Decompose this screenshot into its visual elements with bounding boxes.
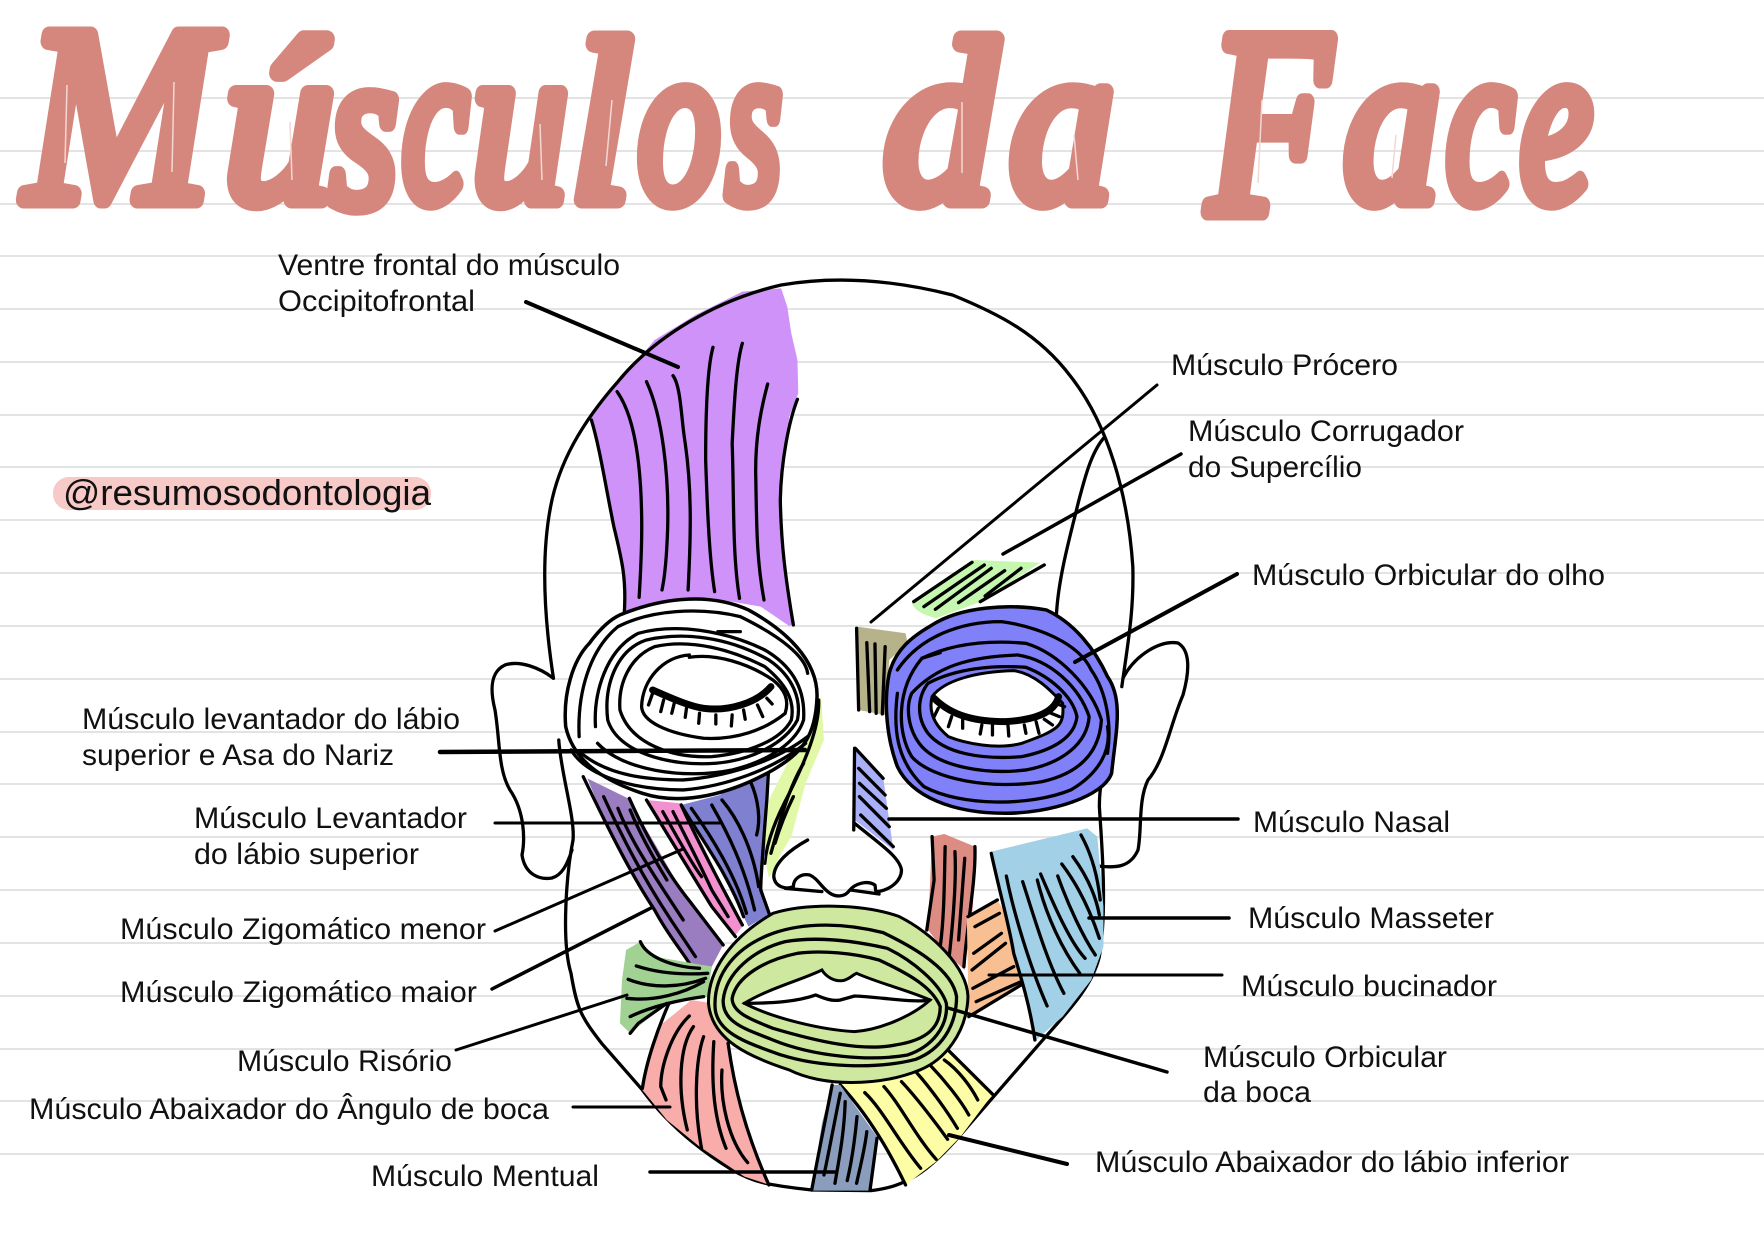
label: masseter: Músculo Masseter — [1248, 902, 1494, 935]
label: ventre frontal: Occipitofrontal — [278, 285, 475, 318]
right ear — [1098, 643, 1188, 867]
label: abaixador do ângulo de boca: Músculo Abaixador do Ângulo de boca — [29, 1093, 549, 1126]
muscle: mentual — [812, 1085, 877, 1191]
title: o — [638, 0, 720, 251]
left ear — [492, 663, 572, 878]
muscle: nasal — [854, 748, 893, 850]
head outline — [545, 280, 1133, 1191]
muscle: orbicular do olho esquerdo (branco) — [565, 599, 817, 799]
muscle: levantador do lábio superior e asa do nariz — [764, 697, 824, 878]
label: zigomático maior: Músculo Zigomático maior — [120, 976, 477, 1009]
muscle: abaixador do lábio inferior — [840, 1048, 993, 1185]
label: bucinador: Músculo bucinador — [1241, 970, 1497, 1003]
label: levantador lábio superior: do lábio superior — [194, 838, 419, 871]
label: ventre frontal: Ventre frontal do músculo — [278, 249, 620, 282]
nose — [774, 823, 901, 896]
title: s — [726, 0, 782, 251]
label: corrugador: Músculo Corrugador — [1188, 415, 1464, 448]
label: ventre frontal — [278, 249, 620, 318]
label: risório: Músculo Risório — [237, 1045, 452, 1078]
label: levantador lábio superior: Músculo Levantador — [194, 802, 467, 835]
title: e — [1520, 0, 1592, 251]
label: nasal: Músculo Nasal — [1253, 806, 1450, 839]
title: s — [330, 0, 398, 256]
title: u — [472, 0, 568, 251]
muscle: zigomático maior — [583, 777, 724, 967]
label: mentual: Músculo Mentual — [371, 1160, 599, 1193]
title: c — [402, 0, 468, 251]
label: orbicular da boca — [1203, 1041, 1447, 1109]
handle highlight: @resumosodontologia: @resumosodontologia — [63, 472, 432, 513]
muscle: abaixador do ângulo da boca — [642, 1000, 770, 1185]
title — [23, 0, 1592, 270]
title: d — [884, 0, 997, 251]
muscle: masseter — [991, 828, 1103, 1040]
title: c — [1446, 0, 1514, 251]
label: levantador asa do nariz — [82, 703, 460, 772]
title: ú — [224, 0, 334, 251]
leader lines — [440, 302, 1238, 1172]
muscle: corrugador do supercílio — [912, 560, 1044, 618]
label: prócero: Músculo Prócero — [1171, 349, 1398, 382]
label: levantador asa do nariz: superior e Asa do Nariz — [82, 739, 394, 772]
label: abaixador do lábio inferior: Músculo Abaixador do lábio inferior — [1095, 1146, 1569, 1179]
title: l — [570, 0, 632, 251]
muscle: vermelho (zigomático direito) — [927, 834, 975, 970]
muscle: orbicular da boca — [708, 906, 968, 1082]
muscle: zigomático menor — [646, 800, 742, 937]
label: orbicular da boca: da boca — [1203, 1076, 1311, 1109]
muscle: risório — [620, 942, 712, 1033]
title: a — [1010, 0, 1114, 251]
muscle: orbicular do olho direito (azul) — [886, 607, 1117, 813]
label: corrugador: do Supercílio — [1188, 451, 1362, 484]
label: zigomático menor: Músculo Zigomático menor — [120, 913, 486, 946]
label: orbicular do olho: Músculo Orbicular do olho — [1252, 559, 1605, 592]
muscle: prócero — [857, 627, 908, 715]
panel: face diagram — [440, 280, 1238, 1191]
label: levantador asa do nariz: Músculo levantador do lábio — [82, 703, 460, 736]
muscle: ventre frontal — [591, 288, 798, 626]
muscle: bucinador — [967, 900, 1022, 1017]
label: orbicular da boca: Músculo Orbicular — [1203, 1041, 1447, 1074]
title: a — [1344, 0, 1440, 251]
label: levantador lábio superior — [194, 802, 467, 871]
label: corrugador — [1188, 415, 1464, 484]
muscle: levantador do lábio superior — [681, 765, 770, 927]
